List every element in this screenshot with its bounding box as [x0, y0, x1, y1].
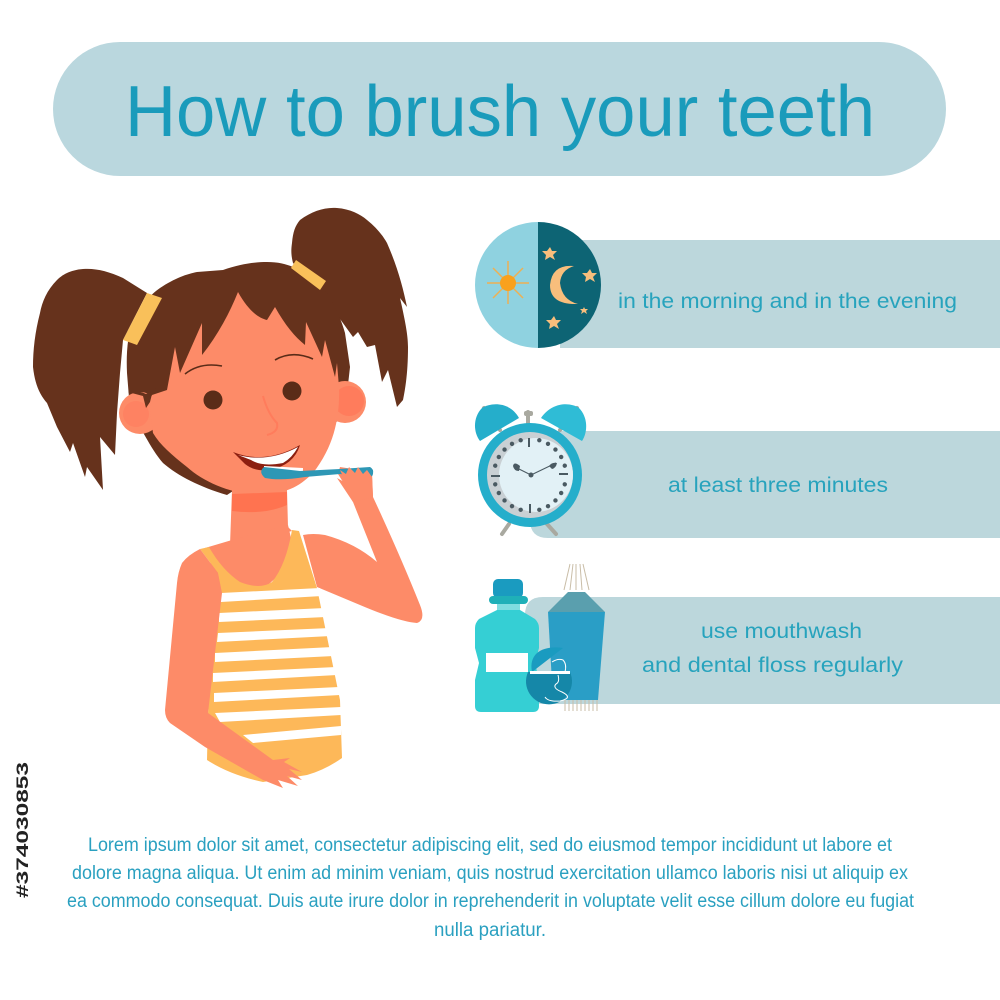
- hair strand over left ear: [128, 380, 170, 408]
- illustration: girl brushing teeth: [33, 208, 422, 788]
- paragraph: [67, 835, 915, 941]
- tank top: [200, 530, 342, 782]
- label: use mouthwash: [701, 620, 862, 643]
- toothbrush: [261, 466, 373, 479]
- label: in the morning and in the evening: [618, 290, 957, 313]
- icon: alarm clock: [475, 404, 586, 534]
- neck: [230, 490, 292, 545]
- ribbon: [525, 597, 1000, 704]
- clock hands: [513, 463, 557, 478]
- chest: [205, 525, 296, 592]
- paragraph: Lorem ipsum dolor sit amet, consectetur adipiscing elit, sed do eiusmod tempor incididunt ut labore et: [88, 835, 893, 856]
- face: [150, 292, 339, 494]
- row 3: mouthwash and floss: [475, 564, 1000, 712]
- ribbon: [560, 240, 1000, 348]
- paragraph: dolore magna aliqua. Ut enim ad minim veniam, quis nostrud exercitation ullamco laboris nisi ut aliquip ex: [72, 863, 908, 884]
- eyes: [204, 382, 302, 410]
- left pigtail: [33, 269, 147, 490]
- icon: mouthwash bottle: [475, 579, 539, 712]
- moon: [550, 266, 578, 304]
- raised arm: [303, 467, 422, 623]
- lower arm and hand: [165, 549, 302, 788]
- icon: day and night: [475, 222, 601, 348]
- title: How to brush your teeth: [125, 72, 875, 152]
- ear left: [119, 392, 161, 434]
- paragraph: ea commodo consequat. Duis aute irure dolor in reprehenderit in voluptate velit esse cillum dolore eu fugiat: [67, 891, 915, 912]
- row 1: morning and evening: [475, 222, 1000, 348]
- row 2: three minutes: [475, 404, 1000, 538]
- stars: [542, 247, 597, 329]
- neck shadow: [232, 492, 287, 512]
- ear right: [324, 381, 366, 423]
- icon: toothpaste tube: [548, 564, 605, 711]
- icon: dental floss: [526, 647, 572, 704]
- label line 2: and dental floss regularly: [642, 654, 904, 677]
- title banner: [53, 42, 946, 176]
- mouth: [233, 445, 300, 470]
- nose: [263, 396, 277, 435]
- stock id: #374030853: [13, 762, 32, 898]
- eyebrows: [185, 355, 313, 374]
- top ponytail: [291, 208, 408, 407]
- fingers: [337, 467, 373, 502]
- paragraph: nulla pariatur.: [434, 920, 546, 941]
- label: at least three minutes: [668, 474, 888, 497]
- top hair band: [291, 260, 326, 290]
- sun: [487, 261, 529, 304]
- tank top stripes: [213, 588, 341, 743]
- head hair: [127, 262, 350, 495]
- left hair band: [123, 293, 162, 345]
- ribbon: [530, 431, 1000, 538]
- left ear cheek: [123, 401, 149, 427]
- clock marks: [493, 438, 567, 512]
